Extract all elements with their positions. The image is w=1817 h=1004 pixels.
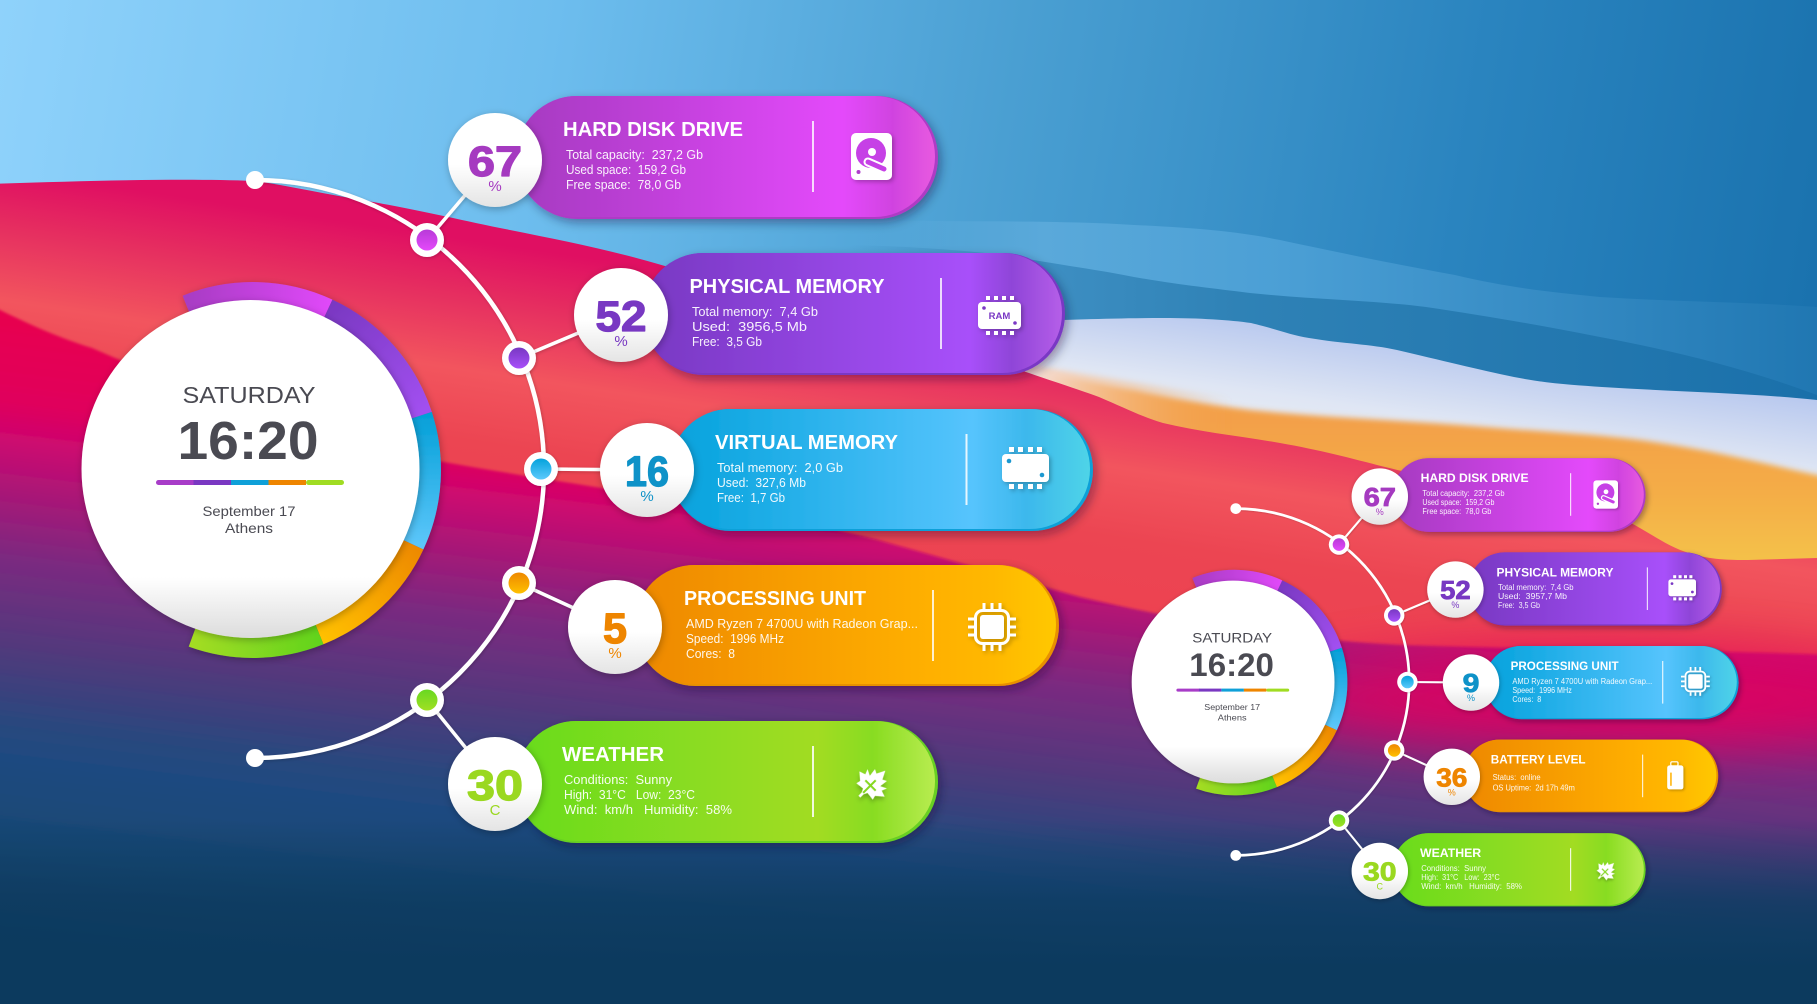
details: Speed: 1996 MHz — [686, 631, 784, 646]
panel: hard disk drive — [1352, 458, 1646, 532]
details: Free space: 78,0 Gb — [566, 177, 681, 192]
details: High: 31°C Low: 23°C — [1421, 873, 1500, 882]
details: Free: 1,7 Gb — [717, 490, 785, 505]
details: Cores: 8 — [1512, 695, 1541, 704]
details: AMD Ryzen 7 4700U with Radeon Grap... — [686, 616, 918, 631]
value gauge: 67 — [468, 138, 522, 186]
details: Wind: km/h Humidity: 58% — [564, 802, 732, 817]
time: 16:20 — [178, 411, 318, 471]
value gauge — [600, 423, 694, 517]
heading: WEATHER — [562, 743, 664, 766]
details: Conditions: Sunny — [1421, 864, 1486, 873]
details: Total capacity: 237,2 Gb — [566, 147, 703, 162]
details — [1493, 773, 1575, 793]
details: Used space: 159,2 Gb — [566, 162, 686, 177]
value gauge — [1427, 561, 1484, 618]
panel: weather — [448, 721, 938, 843]
details: Speed: 1996 MHz — [1512, 686, 1572, 695]
value gauge: 30 — [467, 762, 523, 810]
icon: hard disk — [851, 133, 892, 180]
details: Used: 3956,5 Mb — [692, 319, 807, 334]
details — [692, 304, 818, 349]
details: Wind: km/h Humidity: 58% — [1421, 882, 1522, 891]
icon: leaf — [847, 758, 898, 809]
connector lines — [1339, 497, 1471, 871]
details — [564, 772, 732, 817]
icon: processor — [1681, 667, 1710, 696]
panel: processing unit — [568, 565, 1059, 686]
clock face — [1132, 581, 1334, 783]
clock ring segments — [1195, 576, 1341, 789]
value gauge: 9 — [1463, 670, 1479, 698]
date: September 17 — [202, 503, 296, 519]
value gauge: % — [488, 178, 502, 195]
value gauge — [568, 580, 662, 674]
panel: hard disk drive — [448, 96, 938, 219]
timeline arc — [255, 180, 544, 758]
details: Total memory: 2,0 Gb — [717, 460, 843, 475]
value gauge: % — [1451, 600, 1459, 610]
value gauge — [1424, 749, 1480, 805]
connector lines — [427, 160, 647, 784]
value gauge: 16 — [625, 448, 669, 496]
value gauge — [448, 113, 542, 207]
icon: battery — [1667, 762, 1683, 789]
details — [1498, 583, 1574, 610]
arc nodes — [1329, 534, 1418, 831]
details: Status: online — [1493, 773, 1541, 782]
value gauge: 67 — [1364, 484, 1396, 512]
timeline arc — [1236, 509, 1409, 855]
value gauge: % — [608, 645, 622, 662]
panel: virtual memory — [600, 409, 1093, 531]
details: Free space: 78,0 Gb — [1422, 507, 1492, 516]
location: Athens — [225, 520, 273, 536]
arc nodes — [410, 223, 558, 717]
value gauge: 5 — [603, 605, 627, 653]
icon: RAM chip: RAM — [989, 311, 1010, 322]
heading: PHYSICAL MEMORY — [690, 275, 885, 298]
day label: SATURDAY — [182, 382, 316, 408]
icon: hard disk — [1593, 480, 1618, 509]
heading: PROCESSING UNIT — [1511, 659, 1619, 673]
clock ring segments — [187, 293, 430, 647]
value gauge — [1352, 468, 1408, 525]
panel: processing unit — [1443, 646, 1739, 719]
value gauge: % — [1467, 693, 1475, 703]
details — [1421, 864, 1522, 891]
details: Total memory: 7,4 Gb — [1498, 583, 1574, 592]
details — [686, 616, 918, 661]
details: High: 31°C Low: 23°C — [564, 787, 695, 802]
arc end dots — [1230, 503, 1241, 861]
colour bar — [1176, 689, 1289, 692]
time: 16:20 — [1189, 647, 1274, 683]
value gauge: C — [490, 802, 501, 819]
value gauge — [574, 268, 668, 362]
details: AMD Ryzen 7 4700U with Radeon Grap... — [1512, 677, 1652, 686]
details — [1512, 677, 1652, 704]
day label: SATURDAY — [1192, 629, 1273, 645]
heading: WEATHER — [1420, 846, 1481, 860]
main dashboard widget — [82, 96, 1093, 843]
colour bar — [156, 480, 344, 485]
panel: physical memory — [1427, 552, 1722, 626]
panel: physical memory — [574, 253, 1065, 375]
arc end dots — [246, 171, 264, 767]
details — [1422, 489, 1505, 516]
details: OS Uptime: 2d 17h 49m — [1493, 784, 1575, 793]
icon: RAM chip — [978, 296, 1021, 335]
details: Used: 3957,7 Mb — [1498, 592, 1568, 601]
value gauge — [1352, 843, 1408, 899]
heading: VIRTUAL MEMORY — [715, 431, 898, 454]
heading: BATTERY LEVEL — [1491, 753, 1586, 767]
value gauge: 52 — [1440, 577, 1471, 605]
icon: processor — [968, 603, 1016, 651]
value gauge: 30 — [1363, 859, 1397, 887]
value gauge: 36 — [1436, 764, 1467, 792]
value gauge: % — [1448, 787, 1456, 797]
date: September 17 — [1204, 702, 1260, 712]
panel: battery level — [1424, 740, 1718, 812]
heading: PROCESSING UNIT — [684, 587, 866, 610]
value gauge: C — [1377, 882, 1384, 892]
location: Athens — [1218, 712, 1247, 722]
panel: weather — [1352, 833, 1646, 906]
details: Conditions: Sunny — [564, 772, 672, 787]
value gauge — [1443, 654, 1499, 711]
heading: HARD DISK DRIVE — [563, 118, 743, 141]
value gauge: 52 — [596, 293, 646, 341]
details: Cores: 8 — [686, 646, 735, 661]
value gauge: % — [614, 333, 628, 350]
details: Used: 327,6 Mb — [717, 475, 806, 490]
details: Free: 3,5 Gb — [1498, 601, 1541, 610]
icon: memory chip — [1668, 575, 1696, 600]
icon: memory chip — [1002, 447, 1049, 489]
details: Free: 3,5 Gb — [692, 334, 762, 349]
icon: leaf — [1591, 855, 1622, 886]
details: Total memory: 7,4 Gb — [692, 304, 818, 319]
value gauge: % — [1376, 507, 1384, 517]
details — [717, 460, 843, 505]
details: Used space: 159,2 Gb — [1422, 498, 1495, 507]
heading: HARD DISK DRIVE — [1421, 471, 1529, 485]
details — [566, 147, 703, 192]
heading: PHYSICAL MEMORY — [1497, 565, 1614, 579]
compact dashboard widget — [1132, 458, 1739, 906]
details: Total capacity: 237,2 Gb — [1422, 489, 1505, 498]
value gauge — [448, 737, 542, 831]
value gauge: % — [640, 488, 654, 505]
clock face — [82, 300, 420, 638]
